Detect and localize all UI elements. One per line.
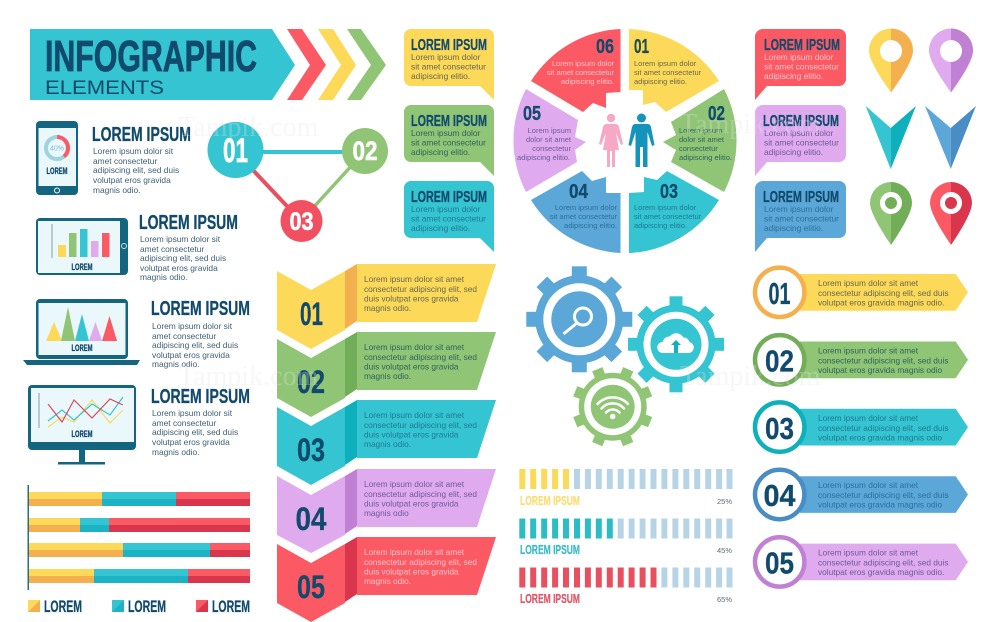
segment 04: 04: [569, 181, 589, 203]
ribbon step 01: 01: [300, 296, 323, 332]
numbered arrow 04: [755, 470, 968, 519]
watermarks: [178, 109, 821, 392]
speech bubble: red: sit amet consectetur: [764, 62, 839, 72]
ribbon step 01: Lorem ipsum dolor sit amet: [364, 274, 465, 284]
text block: phone: volutpat eros gravida: [93, 175, 171, 185]
text block: tablet: adipiscing elit, sed duis: [140, 253, 226, 263]
node network diagram: 01: [223, 132, 248, 170]
ribbon step 05: magnis odio.: [364, 576, 411, 586]
text block: tablet: amet consectetur: [140, 244, 204, 254]
speech bubble: blue: LOREM IPSUM: [763, 189, 839, 206]
ribbon step 04: magnis odio: [364, 508, 409, 518]
ribbon step 01: duis volutpat eros gravida: [364, 294, 459, 304]
numbered arrow 02: Lorem ipsum dolor sit amet: [818, 346, 919, 356]
speech bubble: purple: Lorem ipsum dolor: [764, 128, 834, 138]
progress bar: 25%: LOREM IPSUM: [520, 493, 580, 508]
chart legend: [28, 597, 250, 616]
segment 06: Lorem ipsum dolor: [552, 59, 615, 68]
segment 06: adipiscing elitio.: [561, 77, 614, 86]
text block: tablet: magnis odio.: [140, 272, 188, 282]
ribbon step 03: duis volutpat eros gravida: [364, 430, 459, 440]
numbered arrow 02: 02: [765, 344, 794, 378]
text block: monitor: magnis odio.: [152, 447, 200, 457]
ribbon step 04: [277, 469, 496, 553]
progress bar: 65%: 65%: [717, 595, 732, 604]
title: INFOGRAPHIC: [45, 32, 257, 81]
progress bar: 65%: [519, 568, 732, 606]
icon: teal arrow marker: [866, 106, 916, 169]
device: laptop with triangle chart: [23, 299, 140, 365]
segment 06: 06: [596, 36, 614, 58]
numbered arrow 02: volutpat eros gravida magnis odio: [818, 365, 942, 375]
speech bubble: blue: sit amet consectetur: [764, 214, 839, 224]
numbered arrow 02: consectetur adipiscing elit, sed duis: [818, 356, 949, 366]
segment 06: sit amet consectetur: [547, 68, 614, 77]
segment 03: Lorem ipsum dolor: [634, 203, 697, 212]
segment 02: 02: [708, 103, 725, 125]
segment 02: consectetur: [679, 144, 718, 153]
ribbon step 05: [277, 537, 496, 622]
numbered arrow 05: volutpat eros gravida magnis odio.: [818, 567, 944, 577]
ribbon step 03: [277, 400, 496, 485]
segment 02: adipiscing elitio.: [679, 153, 732, 162]
speech bubble: yellow: Lorem ipsum dolor: [411, 52, 481, 62]
device: tablet with bar chart: LOREM: [72, 262, 92, 272]
numbered arrow 02: [755, 335, 968, 384]
progress bar: 45%: LOREM IPSUM: [520, 542, 580, 557]
device: monitor with line chart: LOREM: [72, 429, 92, 439]
text block: laptop: adipiscing elit, sed duis: [152, 340, 238, 350]
text block: phone: magnis odio.: [93, 185, 140, 195]
icon: man: [628, 114, 654, 167]
numbered arrow 05: [755, 537, 968, 587]
speech bubble: teal: sit amet consectetur: [411, 214, 486, 224]
stacked bar chart: [28, 485, 250, 590]
speech bubble: red: LOREM IPSUM: [764, 37, 840, 54]
speech bubble: teal: Lorem ipsum dolor: [411, 204, 481, 214]
segment 04: sit amet consectetur: [550, 212, 617, 221]
speech bubble: teal: adipiscing elitio.: [411, 223, 470, 233]
segment 03: 03: [660, 181, 678, 203]
node network diagram: [208, 122, 388, 242]
text block: tablet: LOREM IPSUM: [139, 212, 238, 234]
text block: phone: [92, 124, 191, 195]
speech bubble: teal: LOREM IPSUM: [411, 189, 487, 206]
text block: laptop: volutpat eros gravida: [152, 350, 230, 360]
device: monitor with line chart: [28, 385, 136, 464]
ribbon step 02: 02: [297, 364, 325, 400]
chart legend: LOREM: [44, 597, 82, 616]
text block: phone: amet consectetur: [93, 156, 157, 166]
numbered arrow 03: consectetur adipiscing elit, sed duis: [818, 423, 949, 433]
text block: laptop: Lorem ipsum dolor sit: [152, 321, 233, 331]
ribbon step 01: consectetur adipiscing elit, sed: [364, 284, 477, 294]
ribbon step 05: Lorem ipsum dolor sit amet: [364, 547, 465, 557]
speech bubble: purple: [755, 105, 846, 176]
text block: monitor: LOREM IPSUM: [151, 386, 250, 408]
watermarks: Tampik.com: [178, 361, 319, 392]
segment 01: Lorem ipsum dolor: [634, 59, 697, 68]
numbered arrow 05: Lorem ipsum dolor sit amet: [818, 548, 919, 558]
ribbon step 02: [277, 332, 496, 417]
segment 03: adipiscing elitio.: [634, 221, 687, 230]
numbered arrow 03: [755, 402, 968, 452]
segment 02: [663, 89, 737, 192]
segment 01: 01: [634, 36, 649, 58]
numbered arrow 03: Lorem ipsum dolor sit amet: [818, 413, 919, 423]
text block: monitor: adipiscing elit, sed duis: [152, 427, 238, 437]
icon: blue arrow marker: [925, 106, 976, 169]
speech bubble: green: sit amet consectetur: [411, 138, 486, 148]
ribbon step 03: magnis odio.: [364, 439, 411, 449]
progress bar: 45%: [519, 518, 732, 557]
text block: phone: Lorem ipsum dolor sit: [93, 146, 174, 156]
numbered arrow 04: volutpat eros gravida magnis odio: [818, 500, 942, 510]
segment 06: [531, 29, 620, 112]
segment 05: [513, 89, 586, 192]
text block: tablet: Lorem ipsum dolor sit: [140, 234, 221, 244]
ribbon step 04: Lorem ipsum dolor sit amet: [364, 479, 465, 489]
speech bubble: green: Lorem ipsum dolor: [411, 128, 481, 138]
speech bubble: green: [404, 105, 494, 176]
ribbon step 02: duis volutpat eros gravida: [364, 362, 459, 372]
numbered arrow 04: Lorem ipsum dolor sit amet: [818, 480, 919, 490]
banner chevrons: [287, 29, 386, 100]
text block: laptop: LOREM IPSUM: [151, 298, 250, 320]
segment 04: adipiscing elitio.: [564, 221, 617, 230]
device: phone with donut: [36, 121, 78, 195]
speech bubble: green: LOREM IPSUM: [411, 113, 487, 130]
speech bubble: blue: adipiscing elitio.: [764, 223, 823, 233]
numbered arrow 03: 03: [765, 411, 794, 446]
icon: woman: [599, 114, 623, 167]
gear: blue search: [526, 266, 632, 372]
segment 05: consectetur: [532, 144, 571, 153]
speech bubble: red: Lorem ipsum dolor: [764, 52, 834, 62]
ribbon step 01: [277, 264, 496, 349]
text block: monitor: [151, 386, 250, 457]
pie diagram with six segments: [513, 29, 737, 253]
chart legend: LOREM: [212, 597, 250, 616]
device: phone with donut: 40%: [50, 146, 64, 152]
ribbon step 03: 03: [297, 432, 325, 468]
speech bubble: yellow: adipiscing elitio.: [411, 71, 470, 81]
watermarks: Tampik.com: [680, 361, 821, 392]
speech bubble: blue: Lorem ipsum dolor: [764, 204, 834, 214]
segment 01: adipiscing elitio.: [634, 77, 687, 86]
speech bubble: red: adipiscing elitio.: [764, 71, 823, 81]
speech bubble: purple: LOREM IPSUM: [763, 113, 839, 130]
icon: yellow map pin: [869, 28, 913, 92]
numbered arrow 04: consectetur adipiscing elit, sed duis: [818, 490, 949, 500]
speech bubble: yellow: [404, 29, 494, 100]
numbered arrow 01: consectetur adipiscing elit, sed duis: [818, 288, 949, 298]
segment 04: Lorem ipsum dolor: [555, 203, 618, 212]
text block: laptop: [151, 298, 250, 369]
text block: laptop: amet consectetur: [152, 331, 216, 341]
segment 05: Lorem ipsum: [528, 126, 571, 135]
text block: phone: adipiscing elit, sed duis: [93, 165, 179, 175]
ribbon step 05: duis volutpat eros gravida: [364, 566, 459, 576]
ribbon step 03: consectetur adipiscing elit, sed: [364, 420, 477, 430]
numbered arrow 01: [755, 268, 968, 317]
segment 02: dolor sit amet: [679, 135, 725, 144]
segment 04: [531, 171, 620, 253]
ribbon step 04: duis volutpat eros gravida: [364, 498, 459, 508]
icon: green target pin: [870, 182, 912, 245]
chart legend: LOREM: [128, 597, 166, 616]
segment 05: adipiscing elitio.: [517, 153, 570, 162]
numbered arrow 03: volutpat eros gravida magnis odio: [818, 432, 942, 442]
numbered arrow 05: consectetur adipiscing elit, sed duis: [818, 558, 949, 568]
watermarks: Tampik.com: [680, 109, 821, 140]
segment 01: [629, 29, 719, 112]
ribbon step 02: Lorem ipsum dolor sit amet: [364, 342, 465, 352]
speech bubble: green: adipiscing elitio.: [411, 147, 470, 157]
speech bubble: purple: adipiscing elitio.: [764, 147, 823, 157]
speech bubble: yellow: sit amet consectetur: [411, 62, 486, 72]
text block: tablet: [139, 212, 238, 282]
speech bubble: red: [755, 29, 846, 100]
node network diagram: 02: [352, 136, 378, 166]
node network diagram: 03: [290, 208, 314, 236]
title banner: [30, 29, 295, 100]
numbered arrow 04: 04: [764, 478, 796, 513]
gear: green wifi: [573, 367, 652, 446]
ribbon step 01: magnis odio.: [364, 303, 411, 313]
text block: laptop: magnis odio.: [152, 359, 200, 369]
progress bar: 45%: 45%: [717, 546, 732, 555]
ribbon step 05: consectetur adipiscing elit, sed: [364, 557, 477, 567]
speech bubble: teal: [404, 181, 494, 252]
text block: monitor: volutpat eros gravida: [152, 437, 230, 447]
numbered arrow 01: Lorem ipsum dolor sit amet: [818, 278, 919, 288]
speech bubble: purple: sit amet consectetur: [764, 138, 839, 148]
numbered arrow 01: volutpat eros gravida magnis odio.: [818, 298, 944, 308]
progress bar: 25%: [519, 469, 732, 508]
subtitle: ELEMENTS: [45, 78, 164, 99]
ribbon step 02: magnis odio.: [364, 371, 411, 381]
numbered arrow 05: 05: [765, 546, 794, 581]
text block: monitor: amet consectetur: [152, 418, 216, 428]
progress bar: 65%: LOREM IPSUM: [520, 591, 580, 606]
ribbon step 04: 04: [296, 501, 327, 537]
speech bubble: yellow: LOREM IPSUM: [411, 37, 487, 54]
gear: teal cloud: [628, 296, 724, 392]
speech bubble: blue: [755, 181, 846, 252]
ribbon step 05: 05: [297, 569, 325, 605]
segment 05: dolor sit amet: [526, 135, 572, 144]
segment 05: 05: [523, 103, 541, 125]
text block: tablet: volutpat eros gravida: [140, 263, 218, 273]
text block: phone: LOREM IPSUM: [92, 124, 191, 146]
device: tablet with bar chart: [36, 218, 128, 275]
numbered arrow 01: 01: [768, 276, 790, 311]
text block: monitor: Lorem ipsum dolor sit: [152, 408, 233, 418]
ribbon step 02: consectetur adipiscing elit, sed: [364, 352, 477, 362]
ribbon step 04: consectetur adipiscing elit, sed: [364, 489, 477, 499]
device: phone with donut: LOREM: [46, 166, 68, 176]
ribbon step 03: Lorem ipsum dolor sit amet: [364, 410, 465, 420]
segment 03: sit amet consectetur: [634, 212, 702, 221]
segment 02: Lorem ipsum: [679, 126, 722, 135]
icon: red target pin: [930, 182, 972, 245]
segment 03: [629, 171, 719, 253]
segment 01: sit amet consectetur: [634, 68, 702, 77]
device: laptop with triangle chart: LOREM: [72, 343, 92, 353]
progress bar: 25%: 25%: [717, 497, 732, 506]
icon: purple map pin: [929, 28, 973, 92]
watermarks: Tampik.com: [178, 112, 319, 143]
